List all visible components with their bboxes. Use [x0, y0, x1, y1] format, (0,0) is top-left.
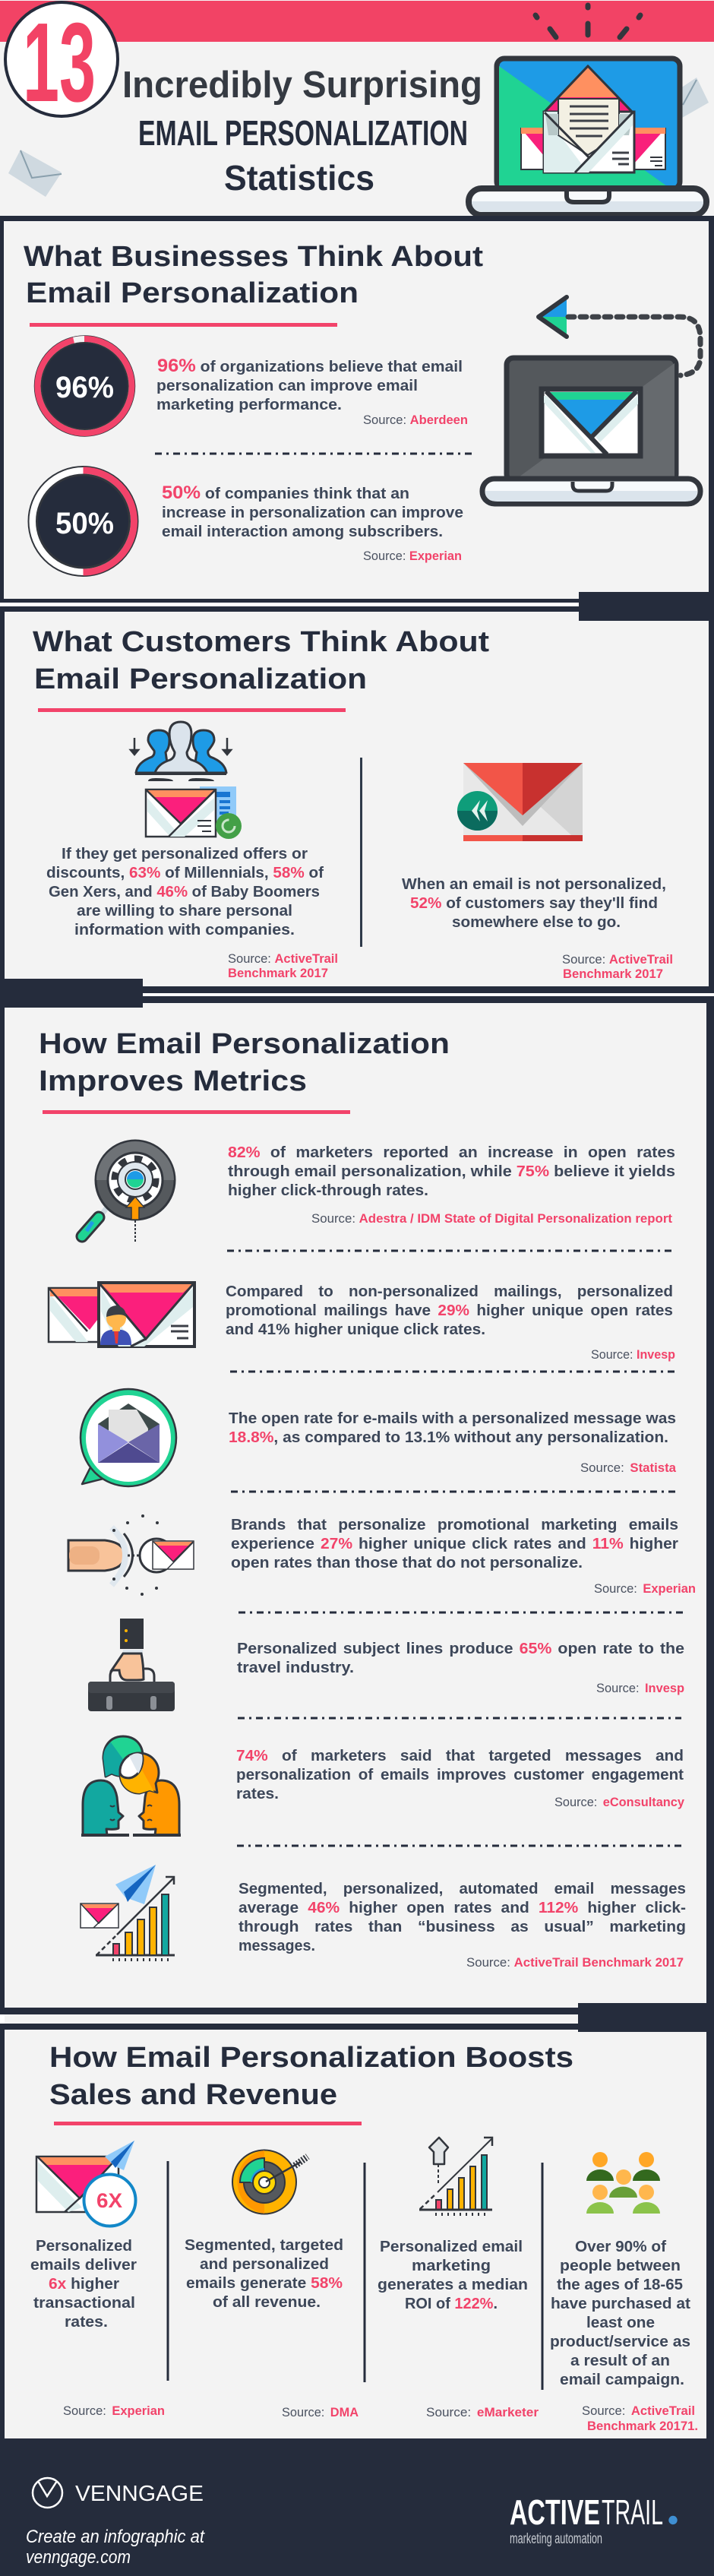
donut: 96 percent: 96% [55, 371, 114, 404]
text: offers and discounts: information with companies. [74, 922, 295, 938]
arrow: dashed back to envelope [539, 297, 700, 375]
text: 58 percent: of all revenue. [213, 2294, 321, 2311]
text: compared: promotional mailings have 29% higher unique open rates [226, 1302, 673, 1319]
text: not personalized: somewhere else to go. [452, 914, 621, 931]
text: create an infographic [26, 2527, 205, 2568]
icon: target with arrow [232, 2150, 308, 2214]
text: 90 percent: least one [586, 2315, 655, 2331]
text: create an infographic: venngage.com [26, 2547, 131, 2568]
source: ActiveTrail Benchmark: Source: ActiveTrail Benchmark 2017 [466, 1955, 684, 1970]
heading [49, 2042, 573, 2111]
text: compared: Compared to non-personalized mailings, personalized [226, 1283, 673, 1300]
text: 74 percent: 74% of marketers said that targeted messages and [236, 1748, 684, 1764]
text: 6x: transactional [33, 2295, 135, 2312]
source: ActiveTrail Benchmark: Source: ActiveTrail [582, 2404, 695, 2418]
panel: improves metrics [0, 993, 714, 2014]
text: segmented: messages. [239, 1938, 315, 1954]
stat text: 96 percent: 96% of organizations believe that email [157, 356, 463, 376]
source: Aberdeen: Source: Aberdeen [363, 413, 468, 427]
icon: red envelope with back arrow [457, 763, 583, 841]
text: not personalized: 52% of customers say they'll find [410, 895, 658, 912]
source: DMA: Source: DMA [282, 2405, 359, 2419]
heading rule [38, 708, 346, 712]
text: 6x: rates. [65, 2314, 108, 2331]
text: 82 percent: higher click-through rates. [228, 1182, 428, 1199]
heading [33, 626, 489, 695]
footer [0, 2438, 714, 2576]
heading [24, 241, 483, 309]
icon: finger tapping envelope [68, 1514, 194, 1596]
text: brands: experience 27% higher unique click rates and 11% higher [231, 1536, 678, 1552]
icon: magnifier with gear [82, 1141, 175, 1242]
text: 82 percent: through email personalization, while 75% believe it yields [228, 1163, 675, 1180]
text: 82 percent [228, 1144, 675, 1199]
text: segmented: Segmented, personalized, automated email messages [239, 1881, 686, 1897]
panel: header [0, 0, 714, 216]
text: 90 percent: email campaign. [560, 2372, 684, 2388]
donut: 96 percent [35, 336, 135, 436]
text: 90 percent [550, 2239, 690, 2388]
text: 74 percent [236, 1748, 684, 1802]
text: 6x: 6x higher [49, 2276, 119, 2293]
text: compared: and 41% higher unique click rates. [226, 1321, 485, 1338]
text: offers and discounts: discounts, 63% of Millennials, 58% of [46, 865, 324, 881]
text: create an infographic: Create an infographic at [26, 2527, 205, 2547]
text: 90 percent: have purchased at [551, 2296, 690, 2312]
source: Statista: Source: Statista [580, 1460, 677, 1475]
text: 82 percent: 82% of marketers reported an increase in open rates [228, 1144, 675, 1161]
icon: group of people [586, 2152, 660, 2214]
icon: speech bubble with envelope [81, 1389, 176, 1486]
panel: boosts sales and revenue [0, 2003, 714, 2576]
heading: How Email Personalization [39, 1028, 450, 1060]
text: brands: Brands that personalize promotional marketing emails [231, 1517, 678, 1533]
heading rule [43, 1110, 350, 1114]
panel: what customers think [0, 606, 714, 1008]
text: ROI: Personalized email [380, 2239, 523, 2255]
text: not personalized: When an email is not personalized, [402, 876, 666, 893]
text: 74 percent: rates. [236, 1786, 279, 1802]
source: Invesp: Source: Invesp [596, 1681, 684, 1695]
text: open rate: The open rate for e-mails with a personalized message was [229, 1410, 676, 1427]
text: ROI: ROI of 122%. [405, 2296, 498, 2312]
text: 58 percent: and personalized [200, 2256, 329, 2273]
logo: ActiveTrail: marketing automation [510, 2531, 602, 2547]
icon: laptop with envelopes [469, 59, 706, 215]
text: offers and discounts: are willing to share personal [77, 903, 292, 919]
source: ActiveTrail left: Source: ActiveTrail [228, 951, 338, 966]
source: Experian: Source: Experian [363, 549, 462, 563]
donut: 50 percent: 50% [55, 507, 114, 540]
text: ROI [378, 2239, 528, 2312]
icon: envelopes with person [49, 1283, 194, 1347]
text: offers and discounts: If they get personalized offers or [62, 846, 308, 862]
icon: laptop with envelope [482, 358, 700, 504]
heading: Email Personalization [26, 277, 359, 309]
logo: ActiveTrail: ACTIVE [510, 2492, 600, 2532]
heading: Email Personalization [34, 663, 367, 695]
text: subject lines: Personalized subject lines produce 65% open rate to the [237, 1641, 684, 1657]
source: ActiveTrail right: Benchmark 2017 [563, 967, 663, 981]
icon: rays above laptop [536, 5, 640, 37]
logo: ActiveTrail [510, 2492, 678, 2547]
donut: 50 percent [29, 467, 138, 576]
source: ActiveTrail left: Benchmark 2017 [228, 966, 328, 980]
text: segmented [239, 1881, 686, 1954]
text: 90 percent: the ages of 18-65 [557, 2277, 683, 2293]
heading [39, 1028, 450, 1097]
stat text: 50 percent: increase in personalization can improve [162, 505, 463, 521]
pink header band [0, 1, 714, 42]
title [122, 65, 482, 198]
text: compared [226, 1283, 673, 1338]
text: offers and discounts: Gen Xers, and 46% of Baby Boomers [49, 884, 320, 900]
text: open rate [229, 1410, 676, 1446]
text: segmented: through rates than “business as usual” marketing [239, 1919, 686, 1935]
source: ActiveTrail right: Source: ActiveTrail [562, 952, 673, 967]
source: Adestra: Source: Adestra / IDM State of Digital Personalization report [311, 1211, 672, 1226]
source: ActiveTrail left [228, 951, 338, 980]
stat text: 50 percent: email interaction among subscribers. [162, 524, 443, 540]
text: 74 percent: personalization of emails improves customer engagement [236, 1767, 684, 1783]
text: 6x: emails deliver [30, 2257, 137, 2274]
icon: hand with briefcase [88, 1619, 175, 1711]
text: subject lines [237, 1641, 684, 1676]
title: Incredibly Surprising [122, 65, 482, 106]
text: segmented: average 46% higher open rates and 112% higher click- [239, 1900, 686, 1916]
text: offers and discounts [46, 846, 324, 938]
heading: What Businesses Think About [24, 241, 483, 273]
text: not personalized [402, 876, 666, 931]
text: 58 percent: Segmented, targeted [185, 2237, 343, 2254]
text: ROI: generates a median [378, 2277, 528, 2293]
icon: rising bars with arrow [419, 2138, 492, 2214]
heading: How Email Personalization Boosts [49, 2042, 573, 2074]
icon: two heads talking [81, 1736, 181, 1835]
source: ActiveTrail Benchmark [582, 2404, 698, 2433]
stat text: 96 percent [156, 356, 463, 413]
text: brands [231, 1517, 678, 1571]
icon: envelope 6X: 6X [96, 2189, 122, 2212]
logo: Venngage: VENNGAGE [75, 2482, 204, 2506]
stat text: 96 percent: personalization can improve email [156, 378, 418, 394]
text: 58 percent: emails generate 58% [186, 2275, 343, 2292]
stat text: 50 percent: 50% of companies think that an [162, 483, 409, 503]
stat text: 50 percent [162, 483, 463, 540]
text: 90 percent: a result of an [570, 2353, 670, 2369]
panel: what businesses think [0, 216, 714, 606]
title: Statistics [224, 158, 374, 198]
text: 6x [30, 2238, 137, 2331]
source: ActiveTrail right [562, 952, 673, 981]
heading rule [30, 323, 337, 327]
icon: people with arrows [131, 722, 231, 781]
title: EMAIL PERSONALIZATION [138, 113, 468, 153]
text: 90 percent: people between [560, 2258, 681, 2274]
text: 58 percent [185, 2237, 343, 2311]
source: Experian: Source: Experian [63, 2404, 165, 2418]
icon: envelope 6X [36, 2141, 135, 2226]
text: subject lines: travel industry. [237, 1660, 354, 1676]
text: ROI: marketing [412, 2258, 491, 2274]
text: 6x: Personalized [36, 2238, 132, 2255]
source: ActiveTrail Benchmark: Benchmark 20171. [587, 2419, 698, 2433]
text: brands: open rates than those that do not personalize. [231, 1555, 583, 1571]
source: Experian: Source: Experian [594, 1581, 696, 1596]
icon: envelope with document [146, 786, 242, 839]
number 13 badge [5, 0, 118, 125]
text: open rate: 18.8%, as compared to 13.1% without any personalization. [229, 1429, 668, 1446]
icon: decorative envelope left [8, 150, 62, 197]
heading: Sales and Revenue [49, 2079, 337, 2111]
text: 90 percent: product/service as [550, 2334, 690, 2350]
logo: ActiveTrail: TRAIL [602, 2492, 663, 2532]
icon: chart with plane and envelope [81, 1865, 175, 1960]
logo: Venngage [33, 2478, 204, 2508]
source: eConsultancy: Source: eConsultancy [554, 1795, 685, 1809]
stat text: 96 percent: marketing performance. [156, 397, 342, 413]
heading: What Customers Think About [33, 626, 489, 658]
source: Invesp: Source: Invesp [591, 1347, 675, 1362]
heading rule [54, 2122, 362, 2125]
text: 90 percent: Over 90% of [575, 2239, 666, 2255]
source: eMarketer: Source: eMarketer [426, 2405, 539, 2419]
heading: Improves Metrics [39, 1065, 307, 1097]
icon: decorative envelope right [676, 78, 709, 118]
number 13 badge: 13 [23, 0, 96, 125]
